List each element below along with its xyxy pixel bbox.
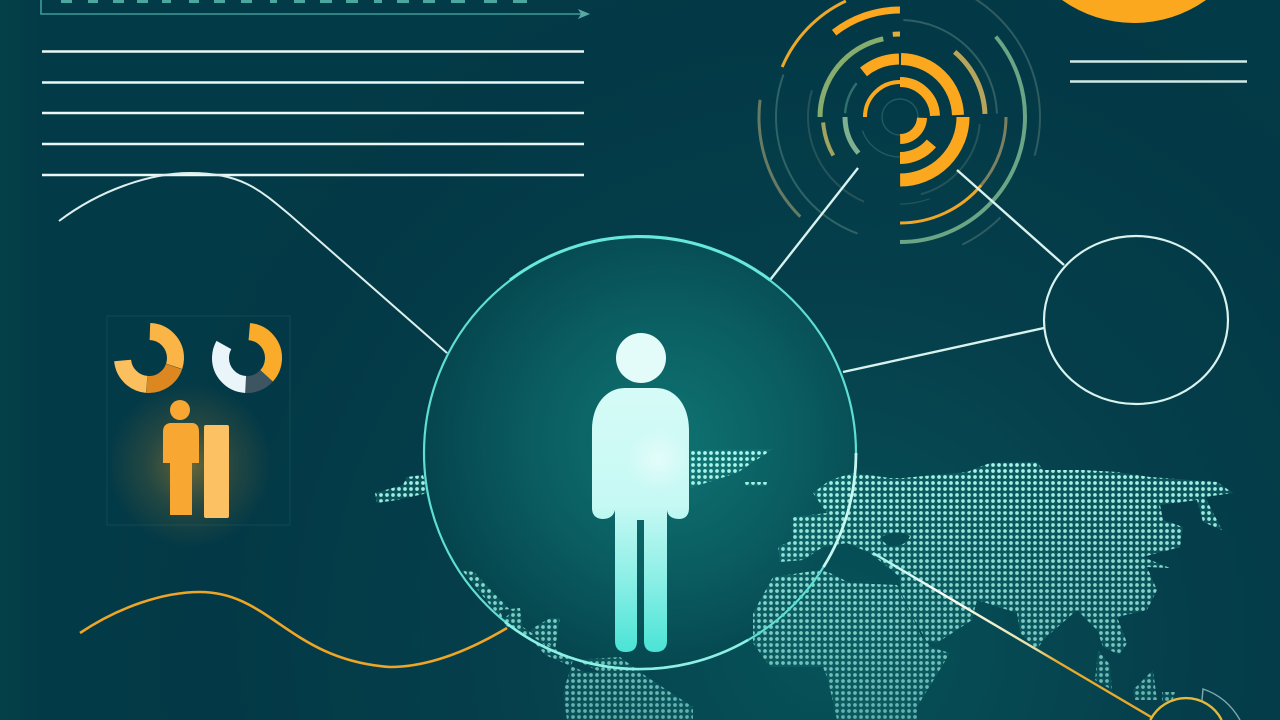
dotted world map	[360, 445, 1240, 720]
icon: small orange person	[163, 400, 199, 515]
text placeholder lines: top right	[1070, 62, 1247, 82]
orange bar	[204, 425, 229, 518]
curve connector: top left to hub	[59, 173, 447, 353]
donut chart: orange	[115, 324, 183, 392]
figure head	[616, 333, 666, 383]
text placeholder lines: left	[42, 52, 584, 175]
panel: donuts and person	[107, 316, 290, 547]
orange sun circle	[1062, 0, 1206, 23]
bottom right gauge	[1150, 689, 1240, 720]
radial arc chart	[699, 0, 1101, 318]
orange wave line	[80, 592, 507, 667]
figure body	[592, 388, 689, 652]
donut chart: orange white slate	[210, 321, 284, 395]
connector lines to satellites	[770, 168, 1064, 372]
hub ring	[424, 236, 856, 669]
beam line to lower right	[873, 553, 1151, 717]
orange glow	[108, 383, 272, 547]
panel frame	[107, 316, 290, 525]
person figure	[592, 333, 690, 652]
axis bar chart fragment with arrow	[41, 0, 590, 19]
satellite circle	[1044, 236, 1228, 404]
central hub disc	[424, 237, 856, 669]
